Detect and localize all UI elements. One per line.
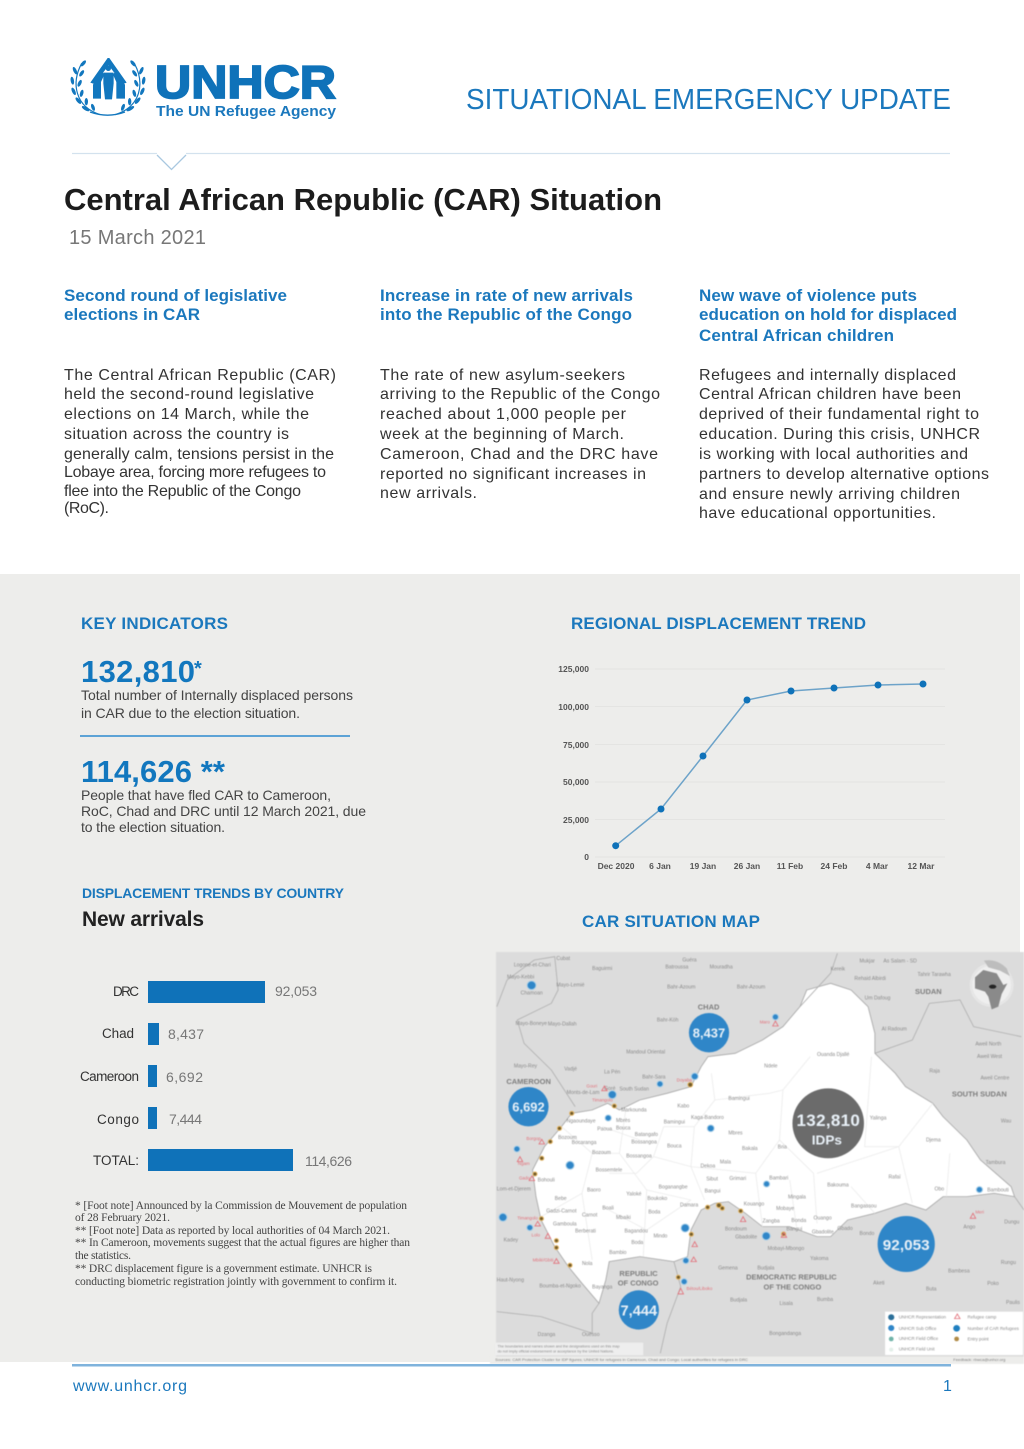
footnotes: ** [Foot note] Data as reported by local authorities of 04 March 2021. [75, 1225, 390, 1237]
x axis labels [598, 861, 935, 871]
column 1 body: situation across the country is [64, 426, 289, 443]
x axis labels: 24 Feb [821, 861, 847, 871]
map: offices and entry points: Maro [760, 1019, 770, 1024]
map disclaimer: The boundaries and names shown and the designations used on this map [497, 1344, 620, 1348]
map: offices and entry points [499, 981, 984, 1294]
bubble: Chad [689, 1013, 729, 1052]
map: place labels: Budjala [757, 1265, 775, 1271]
map: place labels: Rungu [1001, 1260, 1016, 1266]
bubble: IDPs [792, 1088, 864, 1158]
map: place labels: Budjala [730, 1298, 747, 1304]
map: place labels: Djema [926, 1138, 941, 1144]
map: place labels: Ouanda Djallé [817, 1052, 850, 1058]
map: country names: SUDAN [915, 987, 942, 996]
map: place labels: Kabo [677, 1104, 689, 1110]
column 1 body: held the second-round legislative [64, 386, 314, 403]
map: place labels: Boda [648, 1209, 660, 1215]
column 3 body: deprived of their fundamental right to [699, 406, 979, 423]
map: place labels: Ouésso [582, 1332, 600, 1338]
IDP description: Total number of Internally displaced persons [81, 687, 353, 703]
map: place labels: Bahr-Sara [642, 1074, 666, 1080]
bar: DRC: 92,053 [275, 983, 317, 999]
map: place labels: Ngaoundaye [567, 1119, 596, 1125]
map: place labels: Bossemtele [596, 1168, 622, 1174]
column 3 body: is working with local authorities and [699, 446, 968, 463]
map: place labels: Monts-de-Lam [567, 1090, 600, 1096]
map: country names: REPUBLIC [619, 1269, 658, 1278]
map: place labels: Raja [929, 1068, 940, 1074]
map: place labels: Bria [778, 1145, 787, 1151]
map legend: UNHCR Sub Office [899, 1326, 937, 1331]
y axis labels: 25,000 [563, 815, 589, 825]
map: place labels: Yaloké [626, 1191, 642, 1197]
column 2 body: reported no significant increases in [380, 466, 646, 483]
footer [72, 1364, 952, 1395]
map: place labels: Kadey [504, 1238, 519, 1244]
column 3 heading: Central African children [699, 326, 894, 345]
date: 15 March 2021 [69, 227, 206, 249]
map: place labels: Bongandanga [769, 1331, 801, 1337]
map: place labels: Baoro [587, 1187, 601, 1193]
bubble: IDPs: 132,810 [797, 1111, 860, 1130]
bubble: Cameroon: 6,692 [512, 1100, 545, 1115]
bubble: IDPs: IDPs [812, 1132, 842, 1147]
IDP description: in CAR due to the election situation. [81, 705, 300, 721]
footnotes: of 28 February 2021. [75, 1212, 170, 1224]
map: place labels: Mukjar [860, 959, 875, 965]
map: place labels: Logone-et-Chari [514, 963, 551, 969]
map: offices and entry points: Mbilé/Gbiti [533, 1258, 553, 1263]
map: place labels: Cubat [556, 956, 571, 962]
y axis labels: 75,000 [563, 740, 589, 750]
column 1 heading: Second round of legislative [64, 286, 287, 305]
panel: key indicators [80, 614, 366, 835]
map: place labels: Bakouma [827, 1183, 849, 1189]
bar: total [93, 1149, 352, 1171]
map: place labels: Bambouti [987, 1188, 1009, 1194]
bar: Chad [102, 1023, 204, 1045]
map legend: UNHCR Representation [899, 1315, 946, 1320]
indicator: refugees [81, 754, 366, 835]
map: place labels: Boukoko [647, 1196, 667, 1202]
y axis labels: 0 [584, 852, 589, 862]
column 3 body: have educational opportunities. [699, 505, 936, 522]
map: CAR territory [533, 983, 1015, 1303]
map: country names: DEMOCRATIC REPUBLIC [746, 1272, 837, 1281]
column 1 body [64, 367, 336, 517]
map: place labels: Tambura [986, 1160, 1006, 1166]
footnotes: conducting biometric registration jointly with government to confirm it. [75, 1276, 397, 1288]
map: place labels: Paoua [597, 1127, 612, 1133]
map: place labels: Gbado [837, 1226, 853, 1232]
panel: CAR situation map [490, 952, 1024, 1364]
y axis labels: 50,000 [563, 777, 589, 787]
data points [612, 680, 926, 849]
map: place labels: Batroussa [665, 964, 689, 970]
column 1 body: The Central African Republic (CAR) [64, 367, 336, 384]
map: place labels: Bocaranga [572, 1140, 597, 1146]
map: place labels: Bambari [769, 1175, 788, 1181]
map: place labels: Mobayi-Mbongo [768, 1246, 804, 1252]
indicator: IDPs [81, 654, 353, 721]
refugee description [81, 787, 366, 835]
map: place labels: Bumba [817, 1297, 833, 1303]
refugee figure: 114,626 ** [81, 754, 226, 789]
column 3: education [699, 286, 989, 522]
map: offices and entry points: Bétou/Liboko [687, 1286, 713, 1291]
IDP figure: 132,810 [81, 654, 195, 689]
column 2 heading: into the Republic of the Congo [380, 305, 632, 324]
map: place labels: Boumba-et-Ngoko [539, 1283, 581, 1289]
column 3 body: partners to develop alternative options [699, 466, 989, 483]
map: country names: CAMEROON [506, 1077, 551, 1086]
map: place labels: Poko [987, 1281, 999, 1287]
column 2 body [379, 367, 660, 502]
heading: regional displacement trend: REGIONAL DISPLACEMENT TREND [571, 614, 866, 633]
bar: DRC: DRC [113, 984, 139, 999]
map: place labels: Aweil West [977, 1054, 1003, 1060]
column 3 heading: education on hold for displaced [699, 305, 957, 324]
footnotes: * [Foot note] Announced by la Commission de Mouvement de population [75, 1200, 407, 1212]
map: country names: OF CONGO [618, 1278, 659, 1287]
map: place labels: Mandoul Oriental [626, 1049, 665, 1055]
map: place labels: Bouca [667, 1143, 682, 1149]
bar: Chad: Chad [102, 1026, 134, 1041]
map: place labels: Haut-Nyong [497, 1278, 524, 1284]
column 1 body: generally calm, tensions persist in the [64, 446, 334, 463]
map: place labels: Boda [631, 1240, 643, 1246]
map: place labels: Berberati [575, 1228, 596, 1234]
map: place labels: Gemena [718, 1265, 738, 1271]
column 1: legislative elections [64, 286, 336, 517]
map: place labels: Bagandou [625, 1229, 648, 1235]
map: offices and entry points: Gado [519, 1175, 530, 1180]
column 2 heading [380, 286, 633, 324]
map: place labels: Mbres [728, 1131, 743, 1137]
map legend: Entry point [968, 1336, 989, 1341]
bar: Cameroon: Cameroon [80, 1069, 139, 1084]
map: place labels: Mayo-Kebbi [507, 974, 534, 980]
map: place labels: Bohouli [538, 1178, 555, 1184]
refugee description: to the election situation. [81, 819, 225, 835]
bar: total: 114,626 [305, 1153, 352, 1169]
bar: Chad: 8,437 [168, 1026, 204, 1042]
map: country names: OF THE CONGO [764, 1282, 822, 1291]
subheading: DISPLACEMENT TRENDS BY COUNTRY [82, 885, 345, 901]
map: place labels: Lom-et-Djerem [497, 1187, 531, 1193]
map legend: UNHCR Field Unit [899, 1347, 935, 1352]
map: place labels: Gbadolite [735, 1234, 757, 1240]
map: offices and entry points: Doyaba [677, 1078, 692, 1083]
column 1 body: flee into the Republic of the Congo [64, 483, 301, 500]
column 1 body: (RoC). [64, 500, 109, 517]
title: Central African Republic (CAR) Situation [64, 182, 662, 217]
column 2 body: reached about 1,000 people per [380, 406, 627, 423]
panel: displacement trends by country [80, 885, 352, 1171]
bar: Congo: Congo [97, 1112, 139, 1127]
bar: Congo [97, 1107, 202, 1129]
map: place labels: Gamboula [553, 1222, 577, 1228]
map: place labels: Mayo-Rey [514, 1063, 538, 1069]
footer website: www.unhcr.org [72, 1378, 187, 1395]
y axis labels: 125,000 [558, 664, 589, 674]
map: place labels: Bakala [742, 1146, 758, 1152]
page number: 1 [943, 1378, 952, 1395]
map: place labels: Bambio [609, 1250, 627, 1256]
map: place labels: Mindo [653, 1234, 668, 1240]
map: place labels: Dekoa [700, 1164, 715, 1170]
bubble: DRC: 92,053 [883, 1237, 930, 1254]
map source strip: Sources: CAR Protection Cluster for IDP figures; UNHCR for refugees in Cameroon, Chad and Congo; Local authorities for refugees in DRC [495, 1357, 748, 1362]
bar: total: TOTAL: [93, 1153, 139, 1168]
heading: key indicators: KEY INDICATORS [81, 614, 228, 633]
map legend: UNHCR Field Office [899, 1336, 939, 1341]
map: place labels: Aweil North [975, 1041, 1002, 1047]
column 3 heading: New wave of violence puts [699, 286, 917, 305]
map: place labels: Ouango [814, 1215, 832, 1221]
map: place labels: Bonda [791, 1218, 806, 1224]
map: place labels: Ango [963, 1224, 976, 1230]
bar: Cameroon [80, 1065, 203, 1087]
map: place labels: Zangba [762, 1219, 780, 1225]
y axis labels: 100,000 [558, 702, 589, 712]
column 2 body: week at the beginning of March. [379, 426, 624, 443]
map: place labels: Grimari [729, 1176, 746, 1182]
x axis labels: 12 Mar [908, 861, 935, 871]
map: neighbouring borders [497, 953, 1024, 1353]
map: place labels: Yakoma [810, 1256, 829, 1262]
footnotes: the statistics. [75, 1250, 131, 1262]
footnotes: ** In Cameroon, movements suggest that the actual figures are higher than [75, 1237, 410, 1249]
map: place labels: Dzanga [538, 1332, 555, 1338]
column 2 body: The rate of new asylum-seekers [380, 367, 625, 384]
bubble: DRC [878, 1216, 935, 1272]
map: place labels: Bozoum [558, 1135, 577, 1141]
map: place labels: Paulis [1006, 1300, 1020, 1306]
footnotes: ** DRC displacement figure is a government estimate. UNHCR is [75, 1263, 373, 1275]
map: place labels: Baguirmi [592, 966, 612, 972]
map: place labels: Obo [934, 1187, 944, 1193]
map: place labels: Mala [720, 1159, 731, 1165]
line chart: regional displacement trend [558, 664, 945, 871]
map: offices and entry points: Ngam [518, 1161, 530, 1166]
map: place labels: Bossangoa [631, 1139, 657, 1145]
map: place labels: Mayo-Dallah [548, 1022, 577, 1028]
map: place labels: Gadzi-Carnot [546, 1208, 577, 1214]
column 2 body: new arrivals. [380, 485, 477, 502]
map: place labels: Bangassou [851, 1204, 877, 1210]
column 1 heading [64, 286, 287, 324]
map: place labels: Chamoan [521, 990, 543, 996]
map: place labels: Wau [1001, 1119, 1011, 1125]
map: offices and entry points: Meri [975, 1209, 984, 1214]
map: place labels: Boali [602, 1206, 614, 1212]
column 3 body: Refugees and internally displaced [699, 367, 956, 384]
map: place labels: Buta [926, 1287, 937, 1293]
map: offices and entry points: Borgop [526, 1136, 541, 1141]
map: place labels: Rafaï [889, 1174, 901, 1180]
map: place labels: Tahrir Tarawha [917, 972, 951, 978]
map: place labels: Carnot [582, 1213, 598, 1219]
map: offices and entry points: Timangolo [517, 1215, 538, 1220]
map: place labels: La Pén [604, 1069, 620, 1075]
map source strip: Feedback: rbwca@unhcr.org [953, 1357, 1005, 1362]
map: country names: SOUTH SUDAN [952, 1090, 1007, 1099]
column 3 body: education. During this crisis, UNHCR [699, 426, 980, 443]
x axis labels: 26 Jan [734, 861, 760, 871]
map: place labels: Bambesa [948, 1269, 970, 1275]
map: place labels: Kaga-Bandoro [691, 1115, 724, 1121]
map: place labels: Markounda [621, 1108, 647, 1114]
panel: grey data section background [0, 574, 1020, 1362]
map: place labels: Bayanga [592, 1284, 613, 1290]
map: country names: CHAD [698, 1002, 720, 1011]
map: place labels [497, 956, 1020, 1338]
column 1 body: elections on 14 March, while the [64, 406, 309, 423]
map: offices and entry points: Lolo [532, 1233, 540, 1238]
IDP description [81, 687, 353, 721]
map: place labels: Kouango [744, 1202, 764, 1208]
x axis labels: 11 Feb [777, 861, 803, 871]
column 3 body [699, 367, 989, 522]
map: place labels: Mingala [788, 1195, 806, 1201]
map: place labels: Bamingui [664, 1119, 685, 1125]
map: place labels: Nola [582, 1261, 593, 1267]
IDP figure: * [194, 658, 202, 680]
bar chart: new arrivals [80, 981, 352, 1171]
logo wordmark: UNHCR [155, 56, 336, 108]
map: place labels: Bossangoa [626, 1153, 652, 1159]
x axis labels: 19 Jan [690, 861, 716, 871]
map: place labels: Mayo-Boneye [516, 1021, 547, 1027]
map: place labels: As Salam - SD [883, 959, 917, 965]
heading: CAR situation map: CAR SITUATION MAP [582, 912, 760, 931]
column 3 body: and ensure newly arriving children [699, 486, 960, 503]
map: place labels: Kereik [831, 967, 846, 973]
map: place labels: Um Dafoug [865, 995, 891, 1001]
map: place labels: Ouadda [822, 1091, 840, 1097]
map: place labels: Bangui [786, 1227, 802, 1233]
map: place labels: Aketi [873, 1280, 885, 1286]
map: offices and entry points: Timangolo [592, 1098, 613, 1103]
map: place labels: Bondo [860, 1231, 874, 1237]
bubble: Cameroon [508, 1087, 549, 1126]
map: place labels: Batangafo [635, 1132, 658, 1138]
map: place labels: Bamingui [728, 1096, 750, 1102]
refugee description: People that have fled CAR to Cameroon, [81, 787, 331, 803]
x axis labels: 4 Mar [866, 861, 889, 871]
map: place labels: Bozoum [592, 1150, 611, 1156]
map: place labels: Aweil Centre [980, 1075, 1009, 1081]
column 1 heading: elections in CAR [64, 305, 200, 324]
map: place labels: Goré [604, 1086, 616, 1092]
map legend [885, 1312, 1023, 1355]
chevron marker [157, 155, 186, 170]
x axis labels: 6 Jan [649, 861, 671, 871]
map disclaimer [495, 1343, 643, 1355]
inset globe: Africa locator [970, 960, 1014, 1009]
map disclaimer: do not imply official endorsement or acceptance by the United Nations. [497, 1350, 614, 1354]
bubble: Chad: 8,437 [693, 1026, 725, 1041]
map: offices and entry points: Gouri [586, 1083, 597, 1088]
map: place labels: Bebe [555, 1196, 567, 1202]
map legend: Number of CAR Refugees [968, 1326, 1020, 1331]
icon: UNHCR emblem [70, 58, 146, 115]
map: place labels: Bouca [616, 1125, 631, 1131]
map: place labels: Bangui [705, 1188, 720, 1194]
map: place labels: Gbadolite [812, 1229, 834, 1235]
map: place labels: Mobaye [776, 1206, 794, 1212]
map: place labels: Ndele [764, 1064, 778, 1070]
map legend: Refugee camp [968, 1314, 997, 1319]
map: place labels: Vadjé [564, 1067, 577, 1073]
column 3 body: Central African children have been [699, 386, 961, 403]
refugee description: RoC, Chad and DRC until 12 March 2021, due [81, 803, 366, 819]
map: place labels: Sibut [706, 1177, 719, 1183]
bubble: Republic of Congo: 7,444 [621, 1304, 657, 1320]
footnotes [75, 1200, 410, 1288]
header label: SITUATIONAL EMERGENCY UPDATE [466, 84, 951, 116]
column 2: new arrivals [379, 286, 660, 502]
column 2 heading: Increase in rate of new arrivals [380, 286, 633, 305]
heading: new arrivals: New arrivals [82, 908, 204, 931]
map: place labels: Guéra [682, 958, 697, 964]
map: country names [506, 987, 1007, 1291]
bar: Cameroon: 6,692 [166, 1069, 203, 1085]
map: place labels: Lisala [780, 1301, 793, 1307]
map: place labels: Mbaiki [616, 1215, 631, 1221]
column 1 body: Lobaye area, forcing more refugees to [64, 464, 326, 481]
map: place labels: Bahr-Köh [657, 1018, 679, 1024]
map: place labels: Bahr-Azoum [667, 984, 695, 990]
bubble: Republic of Congo [619, 1290, 659, 1330]
map: place labels: Yalinga [870, 1115, 887, 1121]
column 2 body: arriving to the Republic of the Congo [380, 386, 660, 403]
map: place labels: Bahr-Azoum [737, 984, 765, 990]
map: place labels: Mouradha [710, 964, 733, 970]
header: UNHCR logo [70, 56, 337, 120]
map source strip [490, 1357, 1024, 1364]
trend line [616, 684, 923, 846]
x axis labels: Dec 2020 [598, 861, 635, 871]
logo tagline: The UN Refugee Agency [156, 103, 337, 120]
map: place labels: Boganangbe [659, 1184, 688, 1190]
map: place labels: South Sudan [619, 1087, 649, 1093]
column 2 body: Cameroon, Chad and the DRC have [380, 446, 658, 463]
y axis labels [558, 664, 589, 862]
map: place labels: Bondoum [725, 1227, 747, 1233]
map: place labels: Damara [680, 1203, 698, 1209]
bar: Congo: 7,444 [169, 1111, 202, 1127]
column 3 heading [699, 286, 957, 345]
map: place labels: Mbrès [616, 1118, 631, 1124]
bar: DRC [113, 981, 317, 1003]
map: place labels: Al Radoum [882, 1027, 907, 1033]
map: place labels: Mayo-Lemié [556, 983, 585, 989]
map: place labels: Dungu [1004, 1219, 1020, 1225]
map: place labels: Rehaid Albirdi [854, 976, 886, 982]
